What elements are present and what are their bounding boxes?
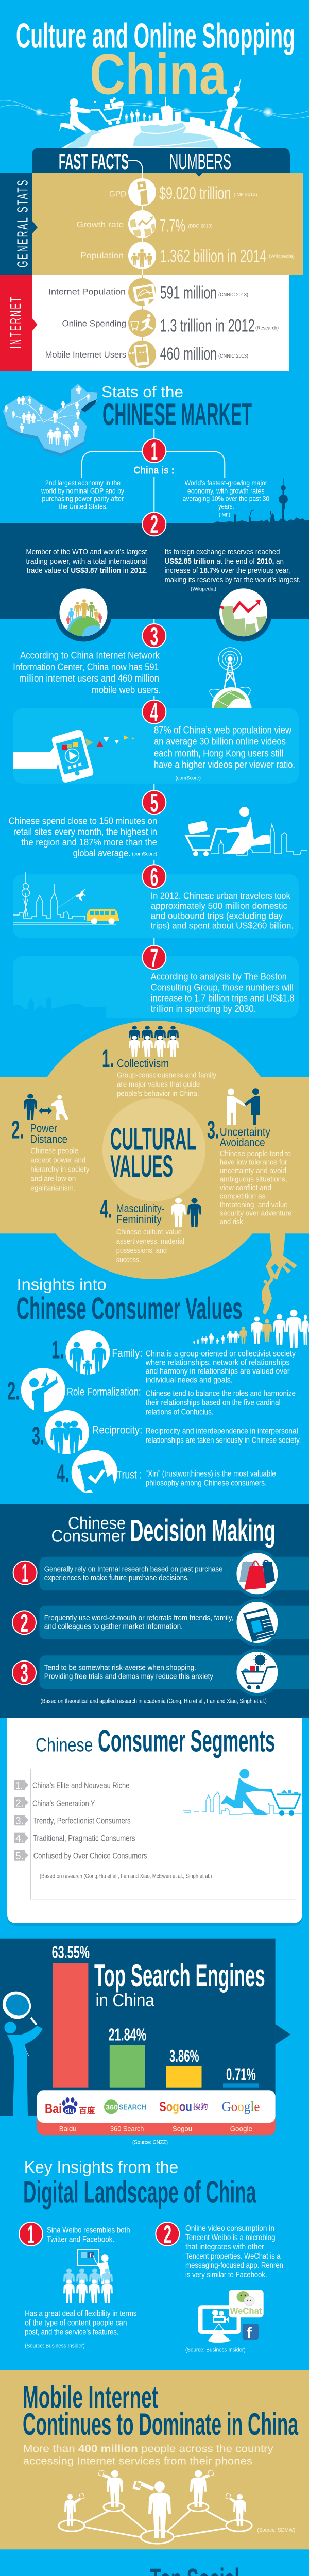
icon: smartphone [129,344,149,366]
text: retail sites: retail sites every month, the highest in [13,826,157,837]
text: foreign exchange reserves: (Wikipedia) [191,586,216,592]
decision 2: word of mouth: Frequently use word-of-mouth or referrals from friends, family, [44,1614,233,1622]
segment 1: China’s Elite and Nouveau Riche [32,1781,129,1790]
icon: skyline with plane and bus [13,872,119,925]
value 3: uncertainty avoidance: Uncertainty [220,1125,270,1138]
bar chart: search engines [52,1943,259,2088]
decision 2: word of mouth [12,1599,309,1646]
heading: Mobile Internet Continues to Dominate in China [23,2380,298,2442]
heading: Chinese Consumer Decision Making: Chinese [68,1513,126,1532]
segment 2 [14,1797,95,1809]
heading: Insights into Chinese Consumer Values [16,1275,243,1326]
stat 5: retail sites [9,784,307,866]
decision 2: word of mouth: 2 [20,1608,28,1637]
text: foreign exchange reserves: US$2.85 trillion at the end of 2010, an [165,557,284,566]
icon: runner with cart [131,314,153,331]
stat: mobile internet users [45,341,248,368]
insight 1: Sina Weibo: (Source: Business Insider) [25,2343,85,2349]
stat 3: internet users [13,619,253,708]
stat 5: retail sites: 5 [150,788,158,817]
value 2: power distance: Power [30,1122,57,1135]
segment 5 [14,1850,147,1862]
text: internet users: Information Center, China now has 591 [13,662,159,673]
stat: internet population: 591 million [160,283,217,302]
value 2: power distance: accept power and [30,1156,85,1164]
insight 2: Tencent and WeChat: messaging-focused app. Renren [185,2261,283,2270]
text: 400 million: accessing Internet services from their phones [23,2455,252,2467]
text: Boston Consulting forecast: Consulting Group, those numbers will [151,982,294,992]
value 4: masculinity femininity: success. [116,1256,141,1264]
stat: online spending: (Research) [255,325,279,331]
heading: Key Insights from the Digital Landscape of China [23,2158,256,2210]
text: online video [154,725,295,781]
stat: growth rate: Growth rate [76,221,124,229]
value 1: collectivism: Group-consciousness and family [117,1071,216,1079]
icon: check mark paper [74,1460,109,1492]
panel: consumer segments [7,1718,302,1926]
text: online video: (comScore) [176,775,201,781]
bar chart: search engines: 63.55% [52,1943,90,1962]
panel: top search engines [0,1939,290,2146]
wave lines [0,100,309,118]
text: retail sites: (comScore) [132,852,157,857]
title: China: China [90,42,227,107]
value 4: masculinity femininity: 4. [100,1195,112,1223]
icon: couple with heart [50,1421,82,1454]
decision 3: risk averse: Tend to be somewhat risk-averse when shopping. [44,1664,196,1672]
segment 4: Traditional, Pragmatic Consumers [33,1834,135,1843]
insight 1: Sina Weibo: Has a great deal of flexibility in terms [25,2310,137,2318]
decision 1: internal research: Generally rely on Internal research based on past purchase [44,1565,222,1574]
source note: CNZZ: (Source: CNZZ) [132,2140,168,2146]
text: retail sites [9,816,157,858]
text: urban travelers: and outbound trips (excluding day [151,910,283,921]
icon: monitor with video, WeChat and Facebook: f [247,2325,252,2342]
panel: urban travelers: 6 [150,862,158,891]
skyline silhouette [213,478,309,523]
decision 3: risk averse: 3 [20,1659,28,1688]
icon: money with rising arrow [215,584,272,642]
panel: trade and reserves band [0,523,309,650]
insight 1: family: 1. [52,1336,64,1364]
icon: shopping bags [239,1560,275,1590]
people row illustration [193,1310,309,1348]
icon: monitor [133,284,156,306]
decision 1: internal research [13,1550,309,1597]
value 3: uncertainty avoidance: uncertainty and avoid [220,1166,286,1175]
stat 1: China is: 1 [151,437,158,466]
source note: segments: (Based on research (Gong,Hiu et al., Fan and Xiao, McEwen et al., Singh et al.) [40,1873,212,1880]
text: urban travelers [151,890,294,931]
logo: 360 Search [104,2099,146,2114]
icon: teacher with audience [62,2249,113,2303]
icon: rising arrow and money [130,216,156,237]
segment 4 [14,1833,135,1844]
stat: mobile internet users: Mobile Internet Users [45,350,126,360]
text: second largest economy: purchasing power parity after [42,495,124,503]
source note: decision making: (Based on theoretical and applied research in academia (Gong, Hiu et al., Fan and Xiao, Singh et al.) [40,1698,267,1704]
stat: GDP: GPD [109,190,126,199]
insight 1: Sina Weibo: Sina Weibo resembles both [47,2226,130,2234]
panel: mobile internet [0,2370,309,2549]
text: internet users [13,650,161,696]
text: second largest economy: world by nominal GDP and by [41,487,124,495]
insight 2: Tencent and WeChat: 2 [164,2220,171,2249]
insight 2: Tencent and WeChat: Tencent Weibo is a microblog [185,2233,276,2242]
stat: GDP: (IMF 2013) [234,192,258,198]
icon: blue shopper with cart and skyline [183,1769,302,1816]
icon: people on globe [56,588,111,642]
value 4: masculinity femininity: Masculinity- [116,1202,165,1215]
value 3: uncertainty avoidance: and risk. [220,1217,245,1226]
decision 2: word of mouth: and colleagues to gather market information. [44,1622,183,1631]
panel: online video [13,698,299,784]
logo: 360 Search: 360 [106,2103,118,2111]
heading: Stats of the Chinese Market [101,383,252,432]
heading: Chinese Consumer Segments [36,1723,275,1758]
segment 5: 5. [15,1851,24,1862]
source note: SDMW: (Source: SDMW) [257,2527,295,2533]
decision 3: risk averse: Providing free trials and demos may reduce this anxiety [44,1672,213,1681]
logo: 360 Search: SEARCH [119,2103,146,2111]
insight 4: trust: 4. [57,1460,69,1488]
bar chart: search engines: 3.86% [169,2046,199,2065]
icon: family [70,1342,106,1376]
stat: online spending [62,309,279,337]
heading: Top Search Engines in China: in China [96,1991,154,2010]
icon: population [131,249,152,267]
logo: Baidu: du [65,2106,74,2114]
segment 4: 4. [15,1833,24,1844]
insight 1: Sina Weibo [19,2220,137,2349]
logo: Sogou: Sogou [159,2098,192,2114]
value 2: power distance: Distance [30,1132,67,1145]
connector line [128,160,143,361]
stat: growth rate: (BBC 2013) [188,224,212,229]
insight 1: Sina Weibo: Twitter and Facebook. [47,2235,114,2244]
number badge 2: 2 [150,510,158,539]
map of China with people [3,384,97,456]
logo: Sogou: 搜狗 [193,2103,208,2111]
insight 2: role formalization: their relationships based on the five cardinal [146,1398,281,1407]
text: internet users: According to China Internet Network [20,650,160,661]
icon: figures reaching [29,1372,58,1412]
panel: fast facts header [32,148,290,174]
stat: GDP [109,178,258,206]
icon: hand holding puppet [262,1233,297,1315]
text: second largest economy [41,479,124,511]
value 2: power distance [11,1094,90,1192]
insight 3: reciprocity [32,1410,301,1454]
insight 1: family: where relationships, network of relationships [145,1359,290,1367]
illustration: mobile users network [59,2470,252,2544]
insight 2: role formalization: 2. [7,1378,20,1405]
stat: internet population [48,278,248,306]
text: Boston Consulting forecast [151,972,294,1014]
insight 1: family [52,1330,296,1385]
panel: search engine logos: 360 Search [110,2125,144,2133]
label: General Stats: GENERAL STATS [15,179,31,267]
value 4: masculinity femininity: assertiveness, material [116,1237,184,1246]
panel: urban travelers [13,862,299,938]
value 1: collectivism: Collectivism [117,1057,169,1070]
panel: general stats [0,173,303,275]
value 2: power distance: hierarchy in society [30,1165,90,1174]
text: internet users: million internet users and 460 million [19,673,159,684]
panel: Boston Consulting forecast [13,938,299,1018]
value 3: uncertainty avoidance: competition as [220,1192,266,1201]
stat: internet population: (CNNIC 2013) [218,292,248,298]
insight 2: role formalization [7,1368,296,1416]
stat: online spending: 1.3 trillion in 2012 [160,316,255,335]
number badge 2 [142,510,166,539]
value 4: masculinity femininity: Chinese culture value [116,1228,182,1236]
insight 2: Tencent and WeChat: Tencent properties. WeChat is a [185,2252,281,2261]
text: fastest growing economy: World’s fastest-growing major [185,479,267,487]
panel: decision making [0,1504,309,1718]
panel: search engine logos: Google [230,2125,252,2133]
stat: population [80,242,295,269]
decision 1: internal research: 1 [22,1559,28,1588]
insight 1: family: China is a group-oriented or collectivist society [146,1350,296,1359]
value 3: uncertainty avoidance: have low tolerance for [220,1158,287,1167]
text: online video: 87% of China’s web population view [154,725,291,736]
value 4: masculinity femininity [100,1195,201,1264]
bar chart: search engines: 21.84% [108,2025,146,2044]
segment 3: Trendy, Perfectionist Consumers [33,1816,131,1825]
heading: Top Search Engines in China [94,1958,265,2010]
insight 1: family: Family: [112,1347,142,1359]
heading: Cultural Values: VALUES [110,1149,173,1183]
insight 1: family: individual needs and goals. [146,1376,233,1385]
section: digital landscape [19,2158,283,2353]
value 4: masculinity femininity: Femininity [116,1213,162,1226]
illustration: globe with skyline [59,77,261,148]
stat: growth rate: 7.7% [160,216,185,235]
segment 3 [14,1815,131,1827]
text: Boston Consulting forecast: increase to 1.7 billion trips and US$1.8 [151,993,294,1003]
stat 1: China is [41,437,269,518]
insight 4: trust: philosophy among Chinese consumers. [146,1479,267,1488]
heading: Chinese Consumer Decision Making: Consumer [52,1527,126,1546]
heading: Insights into Chinese Consumer Values: Insights into [16,1275,107,1293]
text: foreign exchange reserves [165,548,301,592]
stat: internet population: Internet Population [48,287,126,297]
decision 3: risk averse [12,1649,309,1696]
logo: Baidu: Bai [45,2101,62,2116]
panel: search engine logos: Baidu [59,2125,76,2133]
icon: newspaper [243,1608,276,1642]
value 3: uncertainty avoidance: Chinese people tend to [220,1149,291,1158]
logo: Baidu: 百度 [79,2106,95,2115]
text: urban travelers: trips) and spent about US$260 billion. [151,921,294,931]
value 4: masculinity femininity: possessions, and [116,1246,167,1255]
insight 1: Sina Weibo: of the type of content people can [25,2319,127,2328]
value 3: uncertainty avoidance: 3. [207,1116,219,1144]
segment 1 [14,1780,129,1792]
insight 4: trust: Trust : [117,1469,142,1481]
text: foreign exchange reserves: Its foreign exchange reserves reached [165,548,280,556]
heading: Chinese Consumer Decision Making [52,1513,276,1548]
value 1: collectivism: people’s behavior in China. [117,1089,199,1098]
panel: cultural values [0,1021,309,1279]
insight 2: Tencent and WeChat: is very similar to Facebook. [185,2270,267,2279]
insight 2: Tencent and WeChat: Online video consumption in [185,2224,274,2233]
text: Boston Consulting forecast: According to analysis by The Boston [151,972,287,982]
text: fastest growing economy: years. [218,503,234,511]
icon: person with magnifying glass [0,1987,43,2116]
heading: Fast Facts: FAST FACTS [59,149,129,174]
value 2: power distance: 2. [11,1116,24,1144]
text: fastest growing economy [183,479,269,518]
insight 2: role formalization: Role Formalization: [67,1386,141,1398]
text: online video: each month, Hong Kong users still [154,748,283,759]
stat: growth rate [76,210,212,238]
text: retail sites: Chinese spend close to 150 minutes on [9,816,157,826]
icon: hand with phone and play [13,729,134,783]
insight 3: reciprocity: Reciprocity: [92,1425,142,1436]
logo: Google: Google [221,2098,260,2114]
value 1: collectivism: 1. [102,1045,114,1073]
stat: population: (Wikipedia) [269,253,295,259]
heading: Cultural Values [110,1122,197,1183]
insight 2: Tencent and WeChat [155,2220,283,2353]
value 3: uncertainty avoidance: ambiguous situations, [220,1175,287,1184]
text: second largest economy: the United States. [59,503,108,511]
panel: search engine logos: Sogou [173,2125,192,2133]
header section [0,23,309,148]
heading: China is: China is : [134,465,174,476]
insight 1: family: and harmony in relationships are valued over [146,1367,290,1376]
text: urban travelers: approximately 500 million domestic [151,901,287,911]
value 1: collectivism [102,1026,216,1098]
panel: online video: 4 [150,698,158,726]
decision 1: internal research: experiences to make future purchase decisions. [44,1573,189,1582]
heading: Key Insights from the Digital Landscape of China: Key Insights from the [24,2158,178,2176]
stat: GDP: $9.020 trillion [159,184,231,204]
heading: Stats of the Chinese Market: Stats of the [101,383,183,401]
icon: antenna tower on globe [209,647,253,708]
insight 4: trust: “Xin” (trustworthiness) is the most valuable [146,1470,276,1479]
segment 2: 2. [15,1798,24,1809]
logo: Baidu [45,2097,95,2116]
icon: monitor with video, WeChat and Facebook [198,2290,264,2343]
segment 5: Confused by Over Choice Consumers [33,1851,147,1861]
panel: search engine logos [37,2090,276,2135]
heading: Mobile Internet Continues to Dominate in China: Mobile Internet [23,2380,158,2414]
segment 3: 3. [15,1816,24,1827]
icon: hand with money [137,181,148,205]
panel: Boston Consulting forecast: 7 [150,943,158,972]
segment 2: China’s Generation Y [32,1799,95,1808]
text: fastest growing economy: averaging 10% over the past 30 [183,495,269,503]
heading: Numbers: NUMBERS [169,149,231,174]
segment 1: 1. [15,1781,23,1792]
text: Boston Consulting forecast: trillion in spending by 2030. [151,1004,256,1014]
value 1: collectivism: are major values that guide [117,1080,200,1089]
text: 400 million: More than 400 million people across the country [23,2443,274,2454]
panel: internet stats [0,275,289,371]
icon: teacher with audience: f [90,2253,92,2259]
icon: cart with starburst [242,1653,276,1689]
value 3: uncertainty avoidance: security over adventure [220,1209,291,1217]
value 2: power distance: and are low on [30,1174,76,1183]
value 3: uncertainty avoidance: threatening, and value [220,1200,288,1209]
heading: Chinese Consumer Segments: Chinese [36,1734,93,1755]
insight 4: trust [57,1450,276,1493]
text: world trade: Member of the WTO and world’s largest [26,548,147,556]
heading: Cultural Values: CULTURAL [110,1122,197,1157]
stat: mobile internet users: (CNNIC 2013) [218,353,248,359]
insight 3: reciprocity: 3. [32,1422,44,1450]
insight 2: Tencent and WeChat: that integrates with other [185,2243,264,2251]
label: Internet: INTERNET [8,296,24,349]
text: retail sites: global average. [73,848,131,858]
text: fastest growing economy: economy, with growth rates [187,487,265,495]
stat 3: internet users: 3 [150,622,158,651]
insight 2: role formalization: relations of Confucius. [146,1408,213,1416]
text: fastest growing economy: (IMF) [219,512,230,518]
value 2: power distance: Chinese people [30,1146,78,1155]
stat: population: Population [80,251,124,260]
insight 1: Sina Weibo: post, and the service’s features. [25,2328,118,2337]
stats timeline connector [82,429,225,513]
value 2: power distance: egalitarianism. [30,1183,76,1192]
stat: online spending: Online Spending [62,318,126,328]
icon: shopper with phone in cart and skyline [186,807,307,856]
text: urban travelers: In 2012, Chinese urban travelers took [151,890,290,901]
text: second largest economy: 2nd largest economy in the [45,479,121,487]
text: world trade: trading power, with a total international [26,557,147,566]
text: world trade: trade value of US$3.87 trillion in 2012. [27,566,148,575]
icon: running shopper with cart [59,97,124,134]
text: online video: an average 30 billion online videos [154,737,286,748]
value 3: uncertainty avoidance [207,1088,291,1226]
stat: mobile internet users: 460 million [160,344,217,364]
text: foreign exchange reserves: increase of 18.7% over the previous year, [165,566,290,575]
text: world trade [26,548,148,575]
icon: monitor with video, WeChat and Facebook: WeChat [230,2306,262,2316]
text: internet users: mobile web users. [92,685,161,696]
value 3: uncertainty avoidance: view conflict and [220,1183,271,1192]
insight 1: Sina Weibo: 1 [28,2220,34,2249]
bar chart: search engines: 0.71% [226,2064,256,2083]
value 3: uncertainty avoidance: Avoidance [220,1136,265,1149]
text: retail sites: the region and 187% more than the [21,837,157,848]
text: 400 million [23,2443,274,2467]
insight 2: Tencent and WeChat: (Source: Business Insider) [185,2347,245,2353]
